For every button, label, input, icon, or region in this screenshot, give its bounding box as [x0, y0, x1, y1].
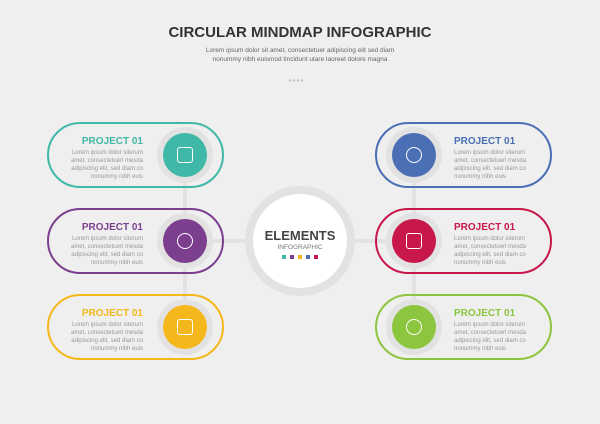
- text left 2: [71, 222, 143, 266]
- text left 3: PROJECT 01: [82, 308, 143, 319]
- text left 2: Lorem ipsum dolor siterum amet, consectetuerl mesda adipiscing elit, sed diam co nonummy nibh euis: [71, 236, 143, 266]
- icon left 1: [157, 127, 213, 183]
- text right 1: PROJECT 01: [454, 136, 515, 147]
- icon right 3: [386, 299, 442, 355]
- text right 3: [454, 308, 526, 352]
- text right 3: PROJECT 01: [454, 308, 515, 319]
- center circle: INFOGRAPHIC: [277, 244, 323, 251]
- pill right 1: [375, 122, 552, 188]
- text left 1: [71, 136, 143, 180]
- center circle: ELEMENTS: [265, 228, 335, 243]
- center circle: [245, 186, 355, 296]
- text right 2: PROJECT 01: [454, 222, 515, 233]
- text left 2: PROJECT 01: [82, 222, 143, 233]
- text right 3: Lorem ipsum dolor siterum amet, consectetuerl mesda adipiscing elit, sed diam co nonummy nibh euis: [454, 322, 526, 352]
- text left 1: PROJECT 01: [82, 136, 143, 147]
- pill left 1: [47, 122, 224, 188]
- pill left 3: [47, 294, 224, 360]
- text right 2: Lorem ipsum dolor siterum amet, consectetuerl mesda adipiscing elit, sed diam co nonummy nibh euis: [454, 236, 526, 266]
- text right 1: Lorem ipsum dolor siterum amet, consectetuerl mesda adipiscing elit, sed diam co nonummy nibh euis: [454, 150, 526, 180]
- icon left 2: [157, 213, 213, 269]
- text left 3: [71, 308, 143, 352]
- subtitle: Lorem ipsum dolor sit amet, consectetuer adipiscing elit sed diam nonummy nibh euismod tincidunt utare laoreet dolore magna: [206, 47, 394, 63]
- pill right 2: [375, 208, 552, 274]
- text right 2: [454, 222, 526, 266]
- title: CIRCULAR MINDMAP INFOGRAPHIC: [168, 24, 432, 41]
- pill left 2: [47, 208, 224, 274]
- pill right 3: [375, 294, 552, 360]
- text right 1: [454, 136, 526, 180]
- icon left 3: [157, 299, 213, 355]
- icon right 1: [386, 127, 442, 183]
- text left 3: Lorem ipsum dolor siterum amet, consectetuerl mesda adipiscing elit, sed diam co nonummy nibh euis: [71, 322, 143, 352]
- icon right 2: [386, 213, 442, 269]
- dots: ••••: [289, 76, 304, 85]
- text left 1: Lorem ipsum dolor siterum amet, consectetuerl mesda adipiscing elit, sed diam co nonummy nibh euis: [71, 150, 143, 180]
